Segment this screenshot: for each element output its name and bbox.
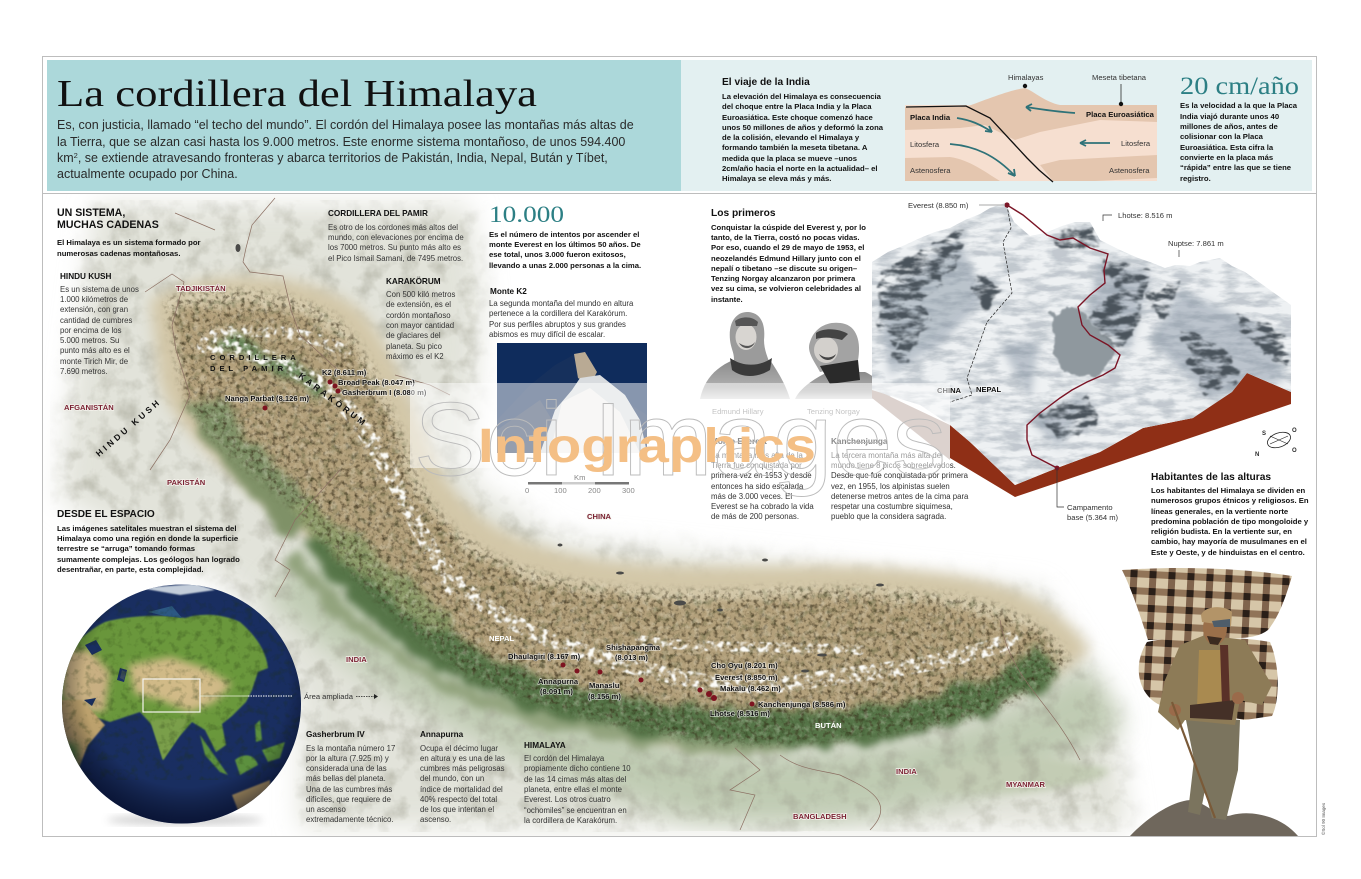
text: Los primeros: neozelandés Edmund Hillary junto con el <box>711 254 861 263</box>
climbing route <box>1007 205 1120 468</box>
country labels on map: MYANMAR <box>1006 780 1045 789</box>
text: Kanchenjunga: Desde que fue conquistada por primera <box>831 471 969 480</box>
arrows <box>950 104 1110 176</box>
text: Annapurna: ascenso. <box>420 815 451 824</box>
body: unos 50 millones de años y deformó la zona <box>722 123 884 132</box>
text: Monte Everest: primera vez en 1953 y desde <box>711 471 812 480</box>
text: Hindu Kush: cantidad de cumbres <box>60 316 132 325</box>
text: Hindu Kush: extensión, con gran <box>60 305 128 314</box>
text: Kanchenjunga <box>831 437 969 521</box>
text: Hindu Kush <box>60 272 139 376</box>
text: Himalaya: propiamente dicho contiene 10 <box>524 764 631 773</box>
terrain labels <box>908 201 1224 522</box>
scale bar: 100 <box>554 486 567 495</box>
peak labels: (8.013 m) <box>615 653 648 662</box>
header: India journey panel <box>681 60 1312 191</box>
text: Kanchenjunga: La tercera montaña más alta del <box>831 451 943 460</box>
stat: 10.000: monte Everest en los últimos 50 años. De <box>489 240 641 249</box>
land texture <box>60 600 300 780</box>
intro text: actualmente ocupado por China. <box>57 167 238 181</box>
text: Karakörum: Con 500 kiló metros <box>386 290 455 299</box>
text: Karakörum: con mayor cantidad <box>386 321 454 330</box>
text: Himalaya: “ochomiles” se encuentran en <box>524 806 627 815</box>
border lines <box>145 198 1080 830</box>
text: Annapurna: 40% respecto del total <box>420 795 497 804</box>
text: Un sistema, muchas cadenas: MUCHAS CADENAS <box>57 219 159 231</box>
text: Gasherbrum IV: extremadamente técnico. <box>306 815 394 824</box>
text: Los primeros: vez su cima, se volvieron celebridades al <box>711 284 861 293</box>
country labels on map <box>64 284 1045 821</box>
country labels on map: BANGLADESH <box>793 812 847 821</box>
text: Karakörum: de glaciares del <box>386 331 441 340</box>
text: Los primeros: Por eso, cuando el 29 de mayo de 1953, el <box>711 243 864 252</box>
intro text: la Tierra, que se alzan casi hasta los 9.000 metros. Este enorme sistema montañoso, de unos 594.400 <box>57 135 625 149</box>
text: Karakörum: máximo es el K2 <box>386 352 444 361</box>
fine snow streaks <box>870 200 1295 490</box>
scale bar: 200 <box>588 486 601 495</box>
Everest 3D terrain block <box>870 200 1295 522</box>
text: Monte K2: abismos es muy difícil de escalar. <box>489 330 605 339</box>
peak labels: Manaslu <box>589 681 620 690</box>
tectonic plate diagram <box>905 73 1157 182</box>
text: Cordillera del Pamir: CORDILLERA DEL PAMIR <box>328 209 428 218</box>
text: Habitantes de las alturas <box>1151 472 1309 557</box>
intro text: 2 <box>74 151 78 160</box>
text: Himalaya: planeta, entre ellas el monte <box>524 785 622 794</box>
text: Kanchenjunga: pueblo que la considera sagrada. <box>831 512 946 521</box>
text: Habitantes de las alturas: Habitantes de las alturas <box>1151 472 1271 483</box>
text: Himalaya: El cordón del Himalaya <box>524 754 605 763</box>
text: Desde el espacio <box>57 509 240 574</box>
header: title panel <box>47 60 681 191</box>
peak labels: Everest (8.850 m) <box>715 673 778 682</box>
text: Annapurna: Annapurna <box>420 730 464 739</box>
mountain range labels: KARAKÖRUM <box>297 371 370 429</box>
enlarged-area frame <box>143 679 200 712</box>
peak markers <box>262 380 754 706</box>
text: Himalaya: de las 14 cimas más altas del <box>524 775 627 784</box>
text: Gasherbrum IV: un ascenso <box>306 805 347 814</box>
terrain labels: NEPAL <box>976 385 1002 394</box>
photo: K2 <box>497 343 647 453</box>
stat: 10.000: Es el número de intentos por ascender el <box>489 230 639 239</box>
text: Kanchenjunga: respetar una costumbre siquimesa, <box>831 502 953 511</box>
text: Los primeros: instante. <box>711 295 743 304</box>
text: Cordillera del Pamir: Es otro de los cordones más altos del <box>328 223 458 232</box>
text: Desde el espacio: DESDE EL ESPACIO <box>57 509 155 520</box>
land: Eurasia <box>58 615 268 760</box>
text: Monte K2: La segunda montaña del mundo en altura <box>489 299 634 308</box>
scale bar: 300 <box>622 486 635 495</box>
stat: 20 cm/año: 20 cm/año <box>1180 73 1299 100</box>
land: SE Asia islands <box>200 720 285 775</box>
stat: 20 cm/año: “rápida” entre las que se tiene <box>1180 163 1292 172</box>
stat: 20 cm/año: Euroasiática. Esta cifra la <box>1180 143 1274 152</box>
text: Gasherbrum IV: por la altura (7.925 m) y <box>306 754 389 763</box>
soft shading <box>878 240 1285 450</box>
text: Himalaya <box>524 741 631 825</box>
intro text <box>57 118 634 181</box>
diagram labels: Litosfera <box>1121 139 1151 148</box>
mountain range labels <box>94 353 370 459</box>
compass: S <box>1262 431 1266 437</box>
country labels on map: NEPAL <box>489 634 515 643</box>
intro text: , se extiende atravesando fronteras y abarca territorios de Pakistán, India, Nepal, Bután y Tíbet, <box>78 151 608 165</box>
peak labels: Nanga Parbat (8.126 m) <box>225 394 309 403</box>
text: Monte K2 <box>489 287 634 339</box>
text: Monte K2: Por sus perfiles abruptos y sus grandes <box>489 320 626 329</box>
text: Hindu Kush: 5.000 metros. Su <box>60 336 119 345</box>
diagram labels: Astenosfera <box>1109 166 1150 175</box>
stat: 20 cm/año: colisionar con la Placa <box>1180 132 1264 141</box>
text: Hindu Kush: Es un sistema de unos <box>60 285 139 294</box>
diagram labels: Meseta tibetana <box>1092 73 1147 82</box>
text: Kanchenjunga: mundo tiene 8 picos sobreelevados. <box>831 461 956 470</box>
text: Monte Everest <box>711 437 814 521</box>
compass: O <box>1292 448 1297 454</box>
text: Los primeros: Conquistar la cúspide del Everest y, por lo <box>711 223 866 232</box>
peak labels <box>225 368 846 718</box>
body: Himalaya se eleva más y más. <box>722 174 831 183</box>
mountain range labels: HINDU KUSH <box>94 396 163 459</box>
country labels on map: PAKISTÁN <box>167 478 205 487</box>
terrain labels: Everest (8.850 m) <box>908 201 969 210</box>
text: Monte Everest: Monte Everest <box>711 437 767 446</box>
body: de la colisión, elevando el Himalaya y <box>722 133 860 142</box>
text: Karakörum: de extensión, es el <box>386 300 451 309</box>
body: medida que la placa se mueve –unos <box>722 154 857 163</box>
satellite map of the Himalaya <box>50 198 1150 832</box>
body: formando también la meseta tibetana. A <box>722 143 868 152</box>
text: Monte Everest: Everest se ha cobrado la vida <box>711 502 814 511</box>
land: Africa <box>62 700 106 766</box>
text: Los primeros <box>711 208 866 304</box>
scale bar: Km <box>574 473 585 482</box>
China-Nepal border <box>950 205 1012 402</box>
text: Kanchenjunga: vez, en 1955, los alpinistas suelen <box>831 482 950 491</box>
markers <box>1023 84 1027 88</box>
scale bar <box>525 473 635 495</box>
text: Un sistema, muchas cadenas <box>57 207 201 258</box>
country labels on map: INDIA <box>896 767 917 776</box>
terrain labels: CHINA <box>937 386 962 395</box>
text: Hindu Kush: por encima de los <box>60 326 122 335</box>
text: Cordillera del Pamir <box>328 209 464 263</box>
text: Karakörum: planeta. Su pico <box>386 342 443 351</box>
hands <box>1169 704 1181 716</box>
peak labels: Gasherbrum I (8.080 m) <box>342 388 427 397</box>
diagram labels: Litosfera <box>910 140 940 149</box>
mountain range labels: DEL PAMIR <box>210 364 287 373</box>
heading: El viaje de la India <box>722 77 810 88</box>
text: Annapurna: de los que intentan el <box>420 805 494 814</box>
stat: 10.000: ese total, unos 3.000 fueron exitosos, <box>489 250 626 259</box>
walking stick <box>1172 702 1215 818</box>
stat: 20 cm/año: millones de años, antes de <box>1180 122 1279 131</box>
head <box>1203 611 1227 645</box>
text: Annapurna: Ocupa el décimo lugar <box>420 744 498 753</box>
credit: ©Sol 90 Images <box>1320 802 1326 835</box>
compass: O <box>1292 428 1297 434</box>
diagram labels: Placa India <box>910 113 951 122</box>
body: del choque entre la Placa India y la Placa <box>722 102 872 111</box>
peak labels: Makalu (8.462 m) <box>720 684 781 693</box>
diagram labels: Placa Euroasiática <box>1086 110 1155 119</box>
country labels on map: AFGANISTÁN <box>64 403 114 412</box>
compass <box>1255 428 1297 458</box>
portrait captions: Edmund Hillary <box>712 407 764 416</box>
diagram labels: Himalayas <box>1008 73 1044 82</box>
peak labels: Shishapangma <box>606 643 661 652</box>
text: Hindu Kush: monte Tirich Mir, de <box>60 357 128 366</box>
peak labels: Broad Peak (8.047 m) <box>338 378 415 387</box>
peak labels: (8.091 m) <box>540 687 573 696</box>
portrait captions: Tenzing Norgay <box>807 407 860 416</box>
text: Karakörum <box>386 276 455 361</box>
peak labels: Dhaulagiri (8.167 m) <box>508 652 581 661</box>
terrain labels: Nuptse: 7.861 m <box>1168 239 1224 248</box>
upper bag <box>1122 568 1292 640</box>
portrait: Tenzing Norgay <box>795 323 892 399</box>
text: Monte Everest: Tierra fue conquistada por <box>711 461 802 470</box>
text: Himalaya: la cordillera de Karakórum. <box>524 816 617 825</box>
text: Un sistema, muchas cadenas: numerosas cadenas montañosas. <box>57 249 180 258</box>
callout: enlarged area: Área ampliada <box>304 692 354 701</box>
stat: 20 cm/año: convierte en la placa más <box>1180 153 1273 162</box>
lakes <box>236 244 884 672</box>
title: La cordillera del Himalaya <box>57 73 537 115</box>
divider under header <box>43 192 1316 194</box>
text: Desde el espacio: Himalaya como una región en donde la superficie <box>57 534 239 543</box>
text: Monte K2: Monte K2 <box>490 287 527 296</box>
mountain range labels: CORDILLERA <box>210 353 300 362</box>
peak labels: Cho Oyu (8.201 m) <box>711 661 778 670</box>
text: Kanchenjunga: Kanchenjunga <box>831 437 888 446</box>
text: Desde el espacio: terrestre se “arruga” tomando formas <box>57 544 195 553</box>
diagram labels: Astenosfera <box>910 166 951 175</box>
text: Himalaya: Everest. Los otros cuatro <box>524 795 611 804</box>
text: Habitantes de las alturas: predomina población de tipo mongoloide y <box>1151 517 1309 526</box>
peak labels: Lhotse (8.516 m) <box>710 709 770 718</box>
text: Desde el espacio: sumamente complejas. Los geólogos han logrado <box>57 555 240 564</box>
text: Los primeros: nepalí o tibetano –se discute su origen– <box>711 264 858 273</box>
stock watermark: Infographics <box>478 420 816 473</box>
text: Hindu Kush: 7.690 metros. <box>60 367 108 376</box>
subduction line <box>906 106 1053 182</box>
text: Hindu Kush: punto más alto es el <box>60 346 130 355</box>
text: Gasherbrum IV <box>306 730 395 824</box>
text: Gasherbrum IV: difíciles, que requiere de <box>306 795 391 804</box>
text: Monte Everest: entonces ha sido escalada <box>711 482 804 491</box>
body <box>722 92 884 183</box>
country labels on map: INDIA <box>346 655 367 664</box>
text: Annapurna: índice de mortalidad del <box>420 785 503 794</box>
text: Desde el espacio: Las imágenes satelitales muestran el sistema del <box>57 524 236 533</box>
text: Un sistema, muchas cadenas: El Himalaya es un sistema formado por <box>57 238 201 247</box>
lower bag <box>1139 638 1278 720</box>
text: Gasherbrum IV: Una de las cumbres más <box>306 785 392 794</box>
rock <box>1130 800 1298 836</box>
country labels on map: CHINA <box>587 512 612 521</box>
text: Annapurna: del mundo, con un <box>420 774 484 783</box>
body: Euroasiática. Este choque comenzó hace <box>722 113 874 122</box>
body: La elevación del Himalaya es consecuencia <box>722 92 882 101</box>
body: 2cm/año hacia el norte en la actualidad– el <box>722 164 878 173</box>
text: Monte K2: pertenece a la cordillera del Karakórum. <box>489 309 627 318</box>
stat: 20 cm/año: Es la velocidad a la que la Placa <box>1180 101 1298 110</box>
stat: 20 cm/año <box>1180 73 1299 183</box>
terrain labels: Lhotse: 8.516 m <box>1118 211 1172 220</box>
text: Los primeros: tanto, de la Tierra, costó no pocas vidas. <box>711 233 860 242</box>
text: Monte Everest: La montaña más alta de la <box>711 451 804 460</box>
peak labels: Annapurna <box>538 677 579 686</box>
callout: enlarged area <box>304 692 378 701</box>
text: Gasherbrum IV: considerada una de las <box>306 764 387 773</box>
text: Habitantes de las alturas: Los habitantes del Himalaya se dividen en <box>1151 486 1306 495</box>
Arctic ice <box>140 584 215 595</box>
legs <box>1185 715 1240 820</box>
text: Cordillera del Pamir: el Pico Ismail Samani, de 7495 metros. <box>328 254 463 263</box>
text: Desde el espacio: desentrañar, en parte, esta complejidad. <box>57 565 204 574</box>
text: Los primeros: Tenzing Norgay alcanzaron por primera <box>711 274 856 283</box>
text: Cordillera del Pamir: mundo, con elevaciones por encima de <box>328 233 464 242</box>
globe <box>55 584 301 825</box>
text: Gasherbrum IV: Gasherbrum IV <box>306 730 365 739</box>
stock watermark: Sci Images <box>414 382 946 498</box>
text: Gasherbrum IV: más bellas del planeta. <box>306 774 386 783</box>
glacier <box>1052 310 1118 378</box>
text: Habitantes de las alturas: líneas generales, en la vertiente norte <box>1151 507 1289 516</box>
intro text: km <box>57 151 74 165</box>
diagram labels <box>910 73 1155 175</box>
compass: N <box>1255 452 1259 458</box>
scale bar: 0 <box>525 486 529 495</box>
text: Kanchenjunga: detenerse metros antes de la cima para <box>831 492 969 501</box>
text: Hindu Kush: 1.000 kilómetros de <box>60 295 128 304</box>
portrait captions <box>712 407 860 416</box>
text: Himalaya: HIMALAYA <box>524 741 566 750</box>
text: Habitantes de las alturas: Este y Oeste, y de hinduistas en el centro. <box>1151 548 1305 557</box>
text: Habitantes de las alturas: religión budista. En la vertiente sur, en <box>1151 527 1292 536</box>
text: Cordillera del Pamir: los 7000 metros. Su punto más alto es <box>328 243 461 252</box>
country labels on map: BUTÁN <box>815 721 842 730</box>
text: Annapurna: en altura y es una de las <box>420 754 505 763</box>
stat: 20 cm/año: India viajó durante unos 40 <box>1180 112 1279 121</box>
dark rock faces <box>878 228 1288 440</box>
text: Annapurna: cumbres más peligrosas <box>420 764 505 773</box>
stat: 10.000 <box>489 202 641 270</box>
stat: 10.000: 10.000 <box>489 202 564 227</box>
text: Hindu Kush: HINDU KUSH <box>60 272 111 281</box>
intro text: Es, con justicia, llamado “el techo del mundo”. El cordón del Himalaya posee las montañas más altas de <box>57 118 634 132</box>
photo: porter with load <box>1122 568 1298 836</box>
portrait: Edmund Hillary <box>700 312 790 399</box>
terrain labels: Campamento <box>1067 503 1113 512</box>
country labels on map: TADJIKISTÁN <box>176 284 226 293</box>
text: Un sistema, muchas cadenas: UN SISTEMA, <box>57 207 125 219</box>
text: Monte Everest: más de 3.000 veces. El <box>711 492 792 501</box>
text: Habitantes de las alturas: numerosos grupos étnicos y religiosos. En <box>1151 496 1309 505</box>
peak labels: (8.156 m) <box>588 692 621 701</box>
text: Habitantes de las alturas: cambio, hay mayoría de musulmanes en el <box>1151 537 1307 546</box>
jacket <box>1158 635 1272 730</box>
text: Karakörum: KARAKÖRUM <box>386 276 441 286</box>
stat: 20 cm/año: registro. <box>1180 174 1211 183</box>
terrain labels: base (5.364 m) <box>1067 513 1119 522</box>
text: Annapurna <box>420 730 505 824</box>
peak labels: K2 (8.611 m) <box>322 368 367 377</box>
peak labels: Kanchenjunga (8.586 m) <box>758 700 846 709</box>
text: Gasherbrum IV: Es la montaña número 17 <box>306 744 395 753</box>
text: Los primeros: Los primeros <box>711 208 776 219</box>
stat: 10.000: llevando a unas 2.000 personas a la cima. <box>489 261 641 270</box>
text: Karakörum: cordón montañoso <box>386 311 451 320</box>
text: Monte Everest: de más de 200 personas. <box>711 512 799 521</box>
